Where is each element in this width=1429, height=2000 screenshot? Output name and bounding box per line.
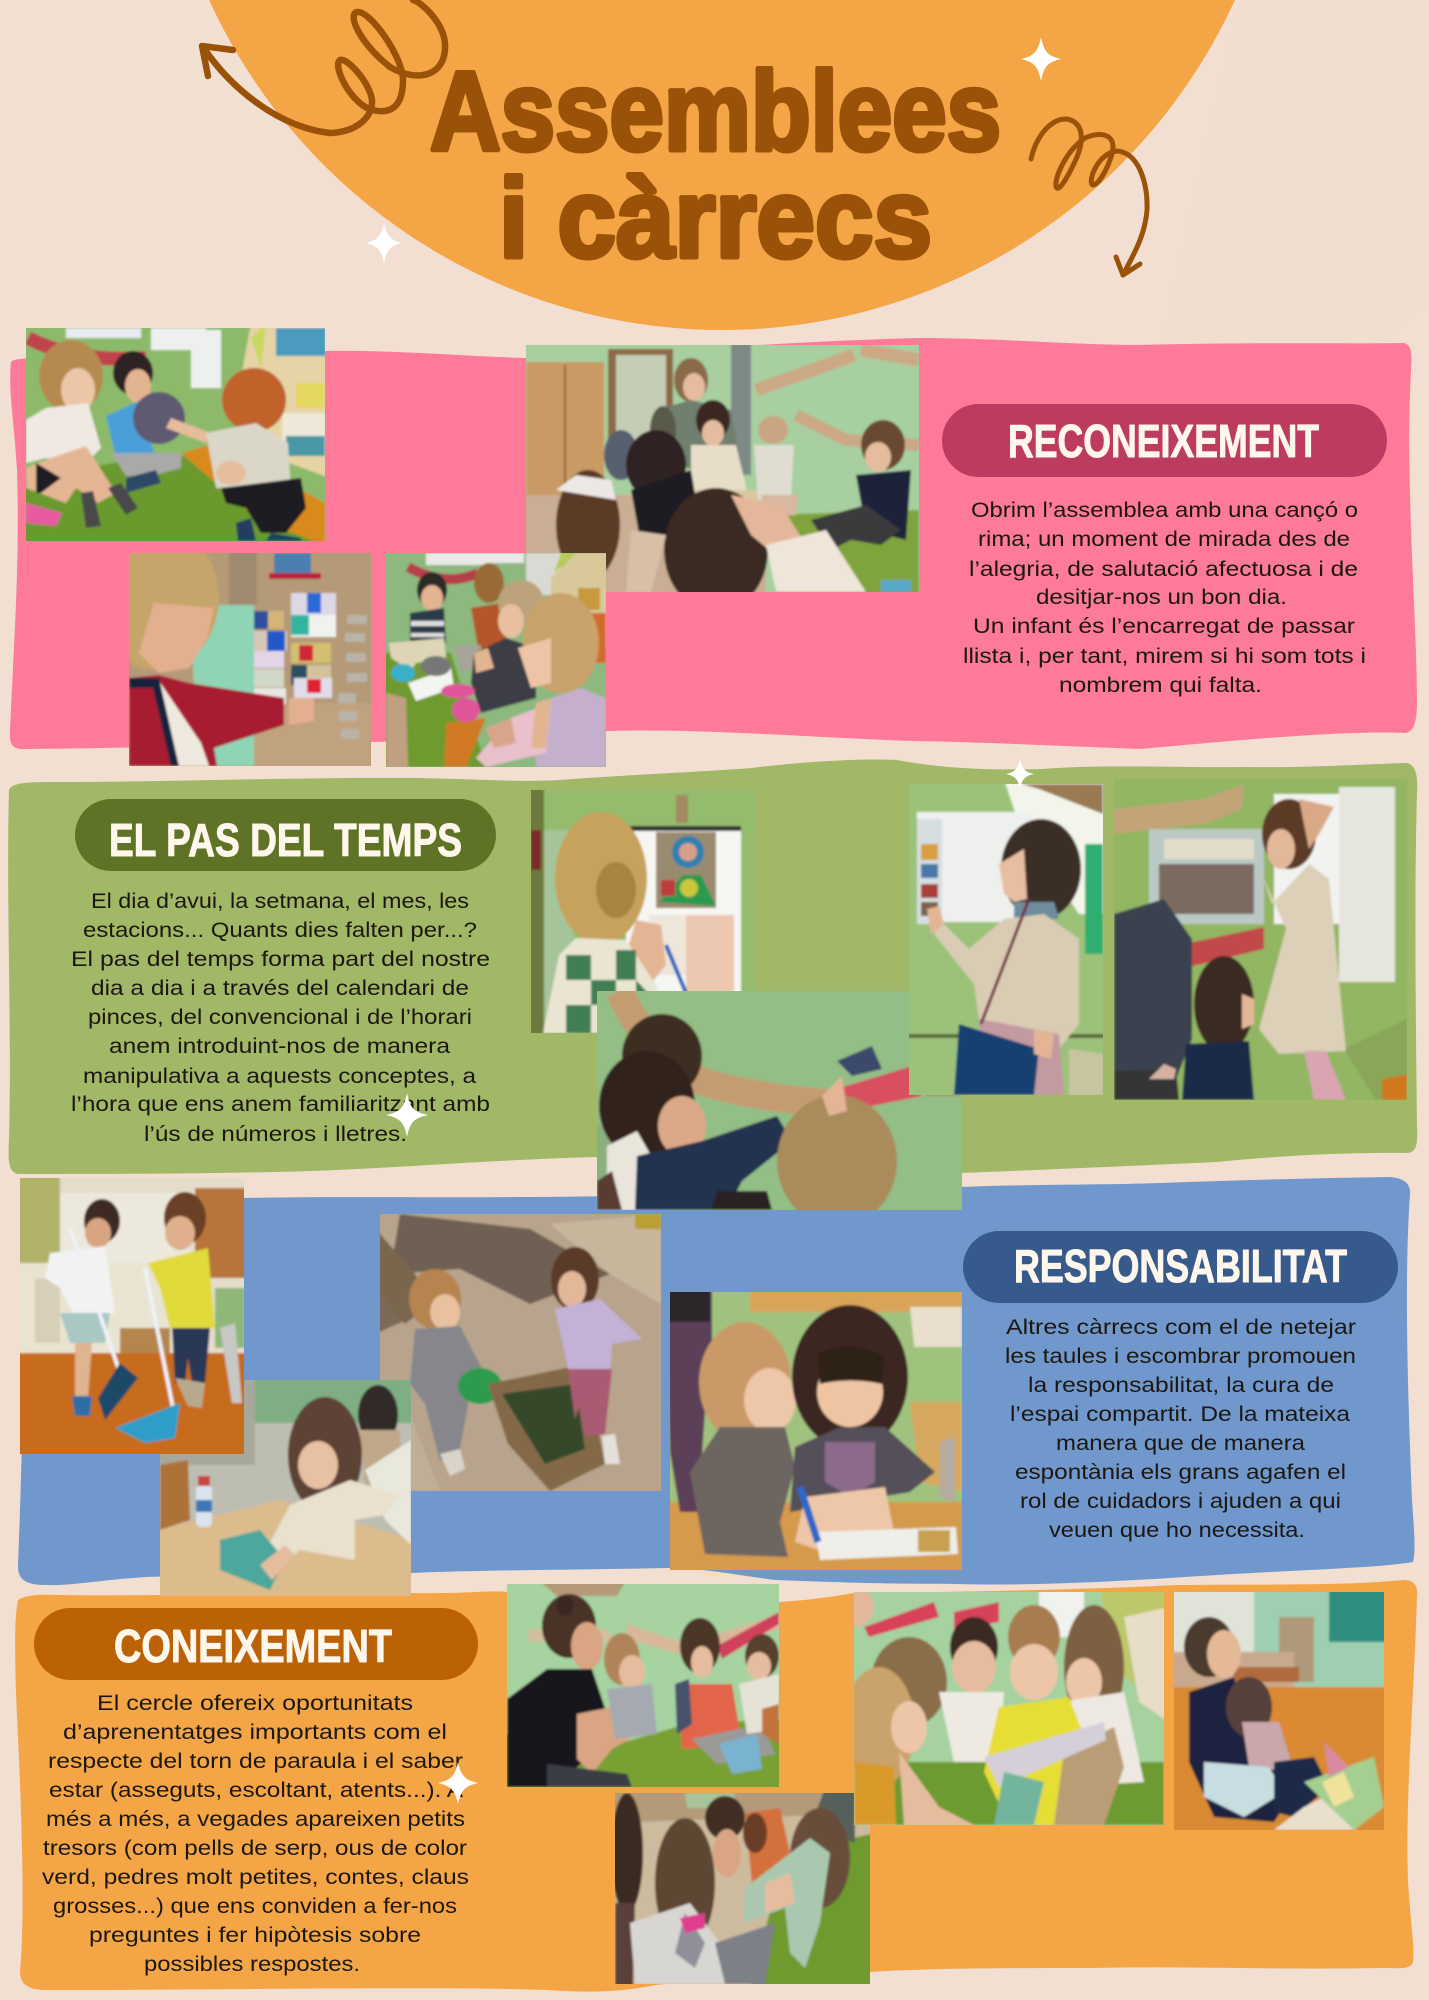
heading pill: el pas del temps xyxy=(75,799,496,871)
photo: two boys sweeping xyxy=(20,1178,244,1454)
orange semicircle xyxy=(158,0,1286,330)
text block: reconeixement: Obrim l’assemblea amb una cançó o xyxy=(971,499,1358,522)
text block: coneixement: respecte del torn de paraula i el saber xyxy=(48,1750,463,1773)
text block: responsabilitat: la responsabilitat, la cura de xyxy=(1028,1374,1334,1397)
text block: coneixement: estar (asseguts, escoltant, atents...). A xyxy=(49,1779,463,1802)
text block: el pas del temps: El pas del temps forma part del nostre xyxy=(71,948,490,971)
heading pill: responsabilitat xyxy=(963,1231,1398,1303)
text block: el pas del temps: pinces, del convencional i de l’horari xyxy=(88,1006,472,1029)
title text xyxy=(430,49,1001,281)
text block: responsabilitat: l’espai compartit. De la mateixa xyxy=(1010,1403,1350,1426)
text block: el pas del temps: El dia d’avui, la setmana, el mes, les xyxy=(91,890,469,913)
band: orange xyxy=(15,1580,1417,1992)
sparkle: green band text xyxy=(386,1093,428,1137)
text block: coneixement: possibles respostes. xyxy=(144,1953,360,1976)
heading pill: coneixement xyxy=(34,1608,478,1680)
panel: el pas del temps xyxy=(8,759,1417,1227)
text block: responsabilitat: manera que de manera xyxy=(1056,1432,1305,1455)
panel: reconeixement xyxy=(10,323,1417,772)
photo: children pointing at the clothespin garland xyxy=(597,991,962,1210)
photo: children at the name board xyxy=(1114,779,1407,1100)
heading pill: el pas del temps: EL PAS DEL TEMPS xyxy=(109,814,462,866)
heading pill: responsabilitat: RESPONSABILITAT xyxy=(1014,1240,1347,1292)
heading pill: reconeixement xyxy=(942,404,1387,477)
text block: responsabilitat xyxy=(1005,1316,1356,1542)
text block: el pas del temps: anem introduint-nos de manera xyxy=(109,1035,450,1058)
text block: coneixement: El cercle ofereix oportunitats xyxy=(97,1692,413,1715)
text block: el pas del temps xyxy=(71,890,490,1146)
text block: el pas del temps: estacions... Quants dies falten per...? xyxy=(83,919,477,942)
title text: Assemblees xyxy=(430,49,1001,174)
photo: teacher with child on wooden floor xyxy=(1174,1592,1384,1830)
text block: el pas del temps: manipulativa a aquests conceptes, a xyxy=(83,1065,476,1088)
text block: reconeixement: desitjar-nos un bon dia. xyxy=(1036,586,1287,609)
band: green xyxy=(8,759,1417,1174)
panel: responsabilitat xyxy=(15,1173,1415,1601)
panel: coneixement xyxy=(15,1579,1417,1992)
photo: teacher with children on the rug xyxy=(507,1584,779,1787)
heading pill: coneixement: CONEIXEMENT xyxy=(114,1620,392,1672)
text block: responsabilitat: espontània els grans agafen el xyxy=(1015,1461,1346,1484)
photo: two girls writing at a table xyxy=(670,1292,962,1570)
text block: coneixement: preguntes i fer hipòtesis sobre xyxy=(89,1924,421,1947)
text block: el pas del temps: l’ús de números i lletres. xyxy=(144,1123,407,1146)
text block: responsabilitat: les taules i escombrar promouen xyxy=(1005,1345,1356,1368)
sparkle: title left xyxy=(366,223,402,263)
text block: reconeixement: nombrem qui falta. xyxy=(1059,674,1262,697)
text block: coneixement: més a més, a vegades apareixen petits xyxy=(46,1808,465,1831)
text block: reconeixement xyxy=(963,499,1366,697)
text block: responsabilitat: Altres càrrecs com el de netejar xyxy=(1006,1316,1356,1339)
text block: coneixement: d’aprenentatges importants com el xyxy=(63,1721,447,1744)
title text: i càrrecs xyxy=(499,156,932,281)
photo: three children passing a soft toy xyxy=(26,328,325,541)
text block: reconeixement: l’alegria, de salutació afectuosa i de xyxy=(969,558,1358,581)
photo: watering plants outdoors xyxy=(380,1214,661,1491)
sparkle: green band top xyxy=(1006,759,1034,789)
photo: girl at the attendance chart holding a book xyxy=(909,784,1103,1095)
sparkle: orange band text xyxy=(438,1762,478,1804)
heading pill: reconeixement: RECONEIXEMENT xyxy=(1008,415,1319,467)
photo: child placing name on the board xyxy=(129,553,371,766)
text block: reconeixement: llista i, per tant, mirem si hi som tots i xyxy=(963,645,1366,668)
photo: child writing on the calendar xyxy=(531,790,756,1033)
text block: responsabilitat: veuen que ho necessita. xyxy=(1049,1519,1305,1542)
text block: reconeixement: Un infant és l’encarregat de passar xyxy=(973,615,1355,638)
band: pink xyxy=(10,338,1417,749)
band: blue xyxy=(18,1177,1415,1585)
text block: el pas del temps: l’hora que ens anem familiaritzant amb xyxy=(71,1093,490,1116)
text block: el pas del temps: dia a dia i a través del calendari de xyxy=(91,977,469,1000)
photo: circle of children clapping xyxy=(386,553,606,767)
text block: coneixement: verd, pedres molt petites, contes, claus xyxy=(42,1866,469,1889)
text block: reconeixement: rima; un moment de mirada des de xyxy=(978,528,1350,551)
photo: children looking at a book close-up from above xyxy=(615,1793,870,1984)
photo: group reading a book xyxy=(854,1592,1164,1825)
photo: child wiping the table xyxy=(160,1380,411,1596)
text block: coneixement: grosses...) que ens conviden a fer-nos xyxy=(53,1895,457,1918)
swirl arrow: right xyxy=(1031,119,1147,275)
text block: responsabilitat: rol de cuidadors i ajuden a qui xyxy=(1020,1490,1341,1513)
swirl arrow: left xyxy=(202,0,445,133)
sparkle: top right xyxy=(1021,37,1061,81)
text block: coneixement: tresors (com pells de serp, ous de color xyxy=(43,1837,467,1860)
photo: teacher singing with the circle xyxy=(526,345,919,592)
text block: coneixement xyxy=(42,1692,469,1976)
title block xyxy=(158,0,1286,330)
